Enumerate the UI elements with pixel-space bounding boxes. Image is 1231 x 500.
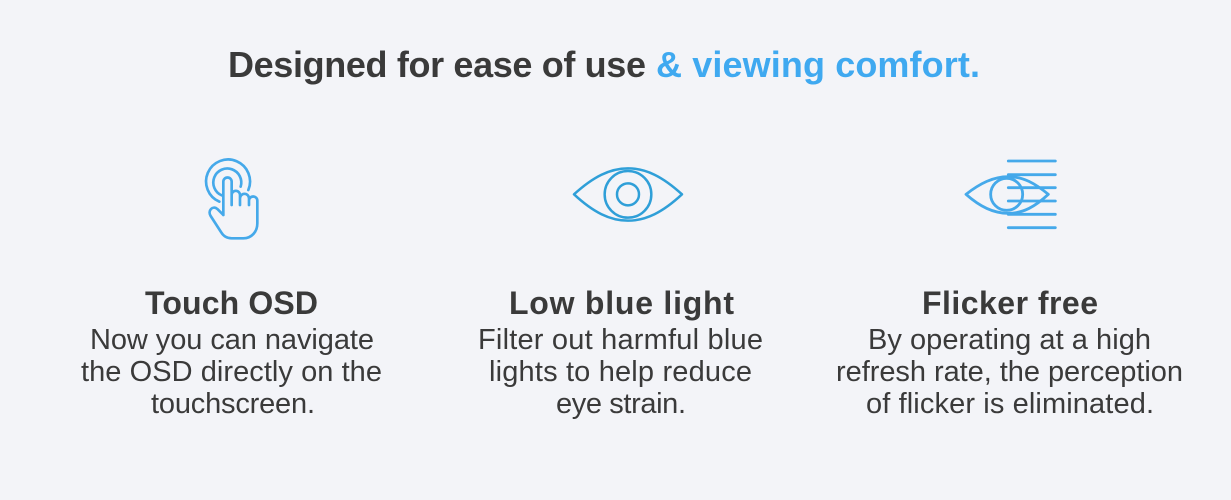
heading: Low blue light: Low blue light xyxy=(509,285,734,321)
text: Low blue light description: lights to help reduce xyxy=(489,356,752,388)
text: Low blue light description: Filter out harmful blue xyxy=(478,324,763,356)
title: Designed for ease of use xyxy=(228,44,646,85)
text: Flicker free description: refresh rate, the perception xyxy=(836,356,1183,388)
text: Touch OSD description: touchscreen. xyxy=(151,388,315,420)
title xyxy=(228,44,980,85)
text: Low blue light description xyxy=(478,324,763,420)
panel: touch OSD xyxy=(81,159,382,420)
text: Flicker free description: of flicker is eliminated. xyxy=(866,388,1154,420)
heading: Flicker free: Flicker free xyxy=(922,285,1098,321)
heading: Touch OSD: Touch OSD xyxy=(145,285,318,321)
text: Flicker free description: By operating at a high xyxy=(868,324,1151,356)
text: Low blue light description: eye strain. xyxy=(556,388,686,420)
icon: eye with flicker lines xyxy=(966,161,1055,228)
text: Touch OSD description: the OSD directly on the xyxy=(81,356,382,388)
text: Flicker free description xyxy=(836,324,1183,420)
icon: eye xyxy=(574,168,682,221)
text: Touch OSD description: Now you can navigate xyxy=(90,324,374,356)
icon: touch hand xyxy=(206,159,257,238)
text: Touch OSD description xyxy=(81,324,382,420)
panel: low blue light xyxy=(478,168,763,420)
panel: flicker free xyxy=(836,161,1183,420)
title: & viewing comfort. xyxy=(656,44,980,85)
